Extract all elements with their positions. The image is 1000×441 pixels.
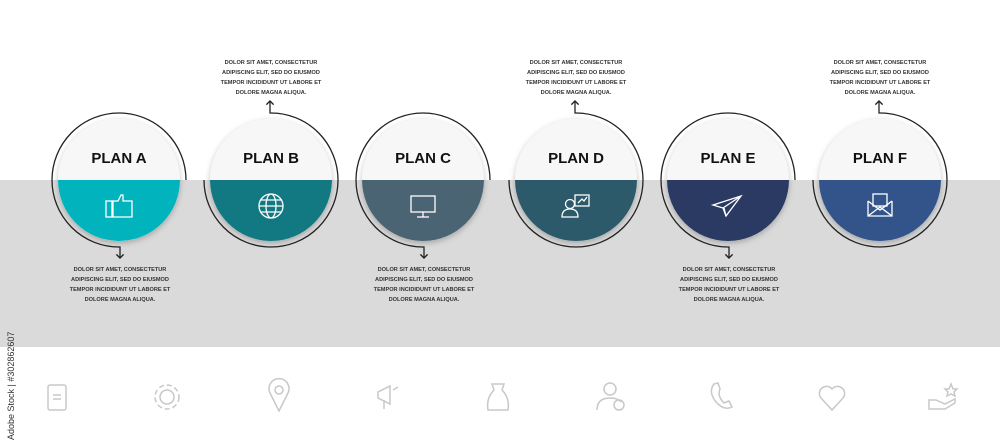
text E: DOLORE MAGNA ALIQUA. xyxy=(694,297,765,303)
icon: globe xyxy=(259,194,283,218)
text A: TEMPOR INCIDIDUNT UT LABORE ET xyxy=(70,287,171,293)
icon: gear xyxy=(155,385,179,409)
text F: ADIPISCING ELIT, SED DO EIUSMOD xyxy=(831,70,929,76)
icon: envelope xyxy=(868,194,892,216)
text B: DOLORE MAGNA ALIQUA. xyxy=(236,90,307,96)
plan B xyxy=(204,101,338,247)
plan B: PLAN B xyxy=(243,150,299,167)
text F: DOLORE MAGNA ALIQUA. xyxy=(845,90,916,96)
text F xyxy=(830,60,931,96)
text A xyxy=(70,267,171,303)
text D: DOLOR SIT AMET, CONSECTETUR xyxy=(530,60,622,66)
text B xyxy=(221,60,322,96)
text A: DOLOR SIT AMET, CONSECTETUR xyxy=(74,267,166,273)
icon: megaphone xyxy=(378,386,398,409)
text C: DOLORE MAGNA ALIQUA. xyxy=(389,297,460,303)
text E xyxy=(679,267,780,303)
plan A: PLAN A xyxy=(91,150,147,167)
icon: clipboard xyxy=(48,385,66,410)
plan E xyxy=(661,113,795,258)
icon: heart xyxy=(819,386,845,410)
icon: bag xyxy=(488,384,508,410)
text A: DOLORE MAGNA ALIQUA. xyxy=(85,297,156,303)
text C: TEMPOR INCIDIDUNT UT LABORE ET xyxy=(374,287,475,293)
plan A xyxy=(52,113,186,258)
text F: TEMPOR INCIDIDUNT UT LABORE ET xyxy=(830,80,931,86)
text A: ADIPISCING ELIT, SED DO EIUSMOD xyxy=(71,277,169,283)
plan F: PLAN F xyxy=(853,150,907,167)
text E: TEMPOR INCIDIDUNT UT LABORE ET xyxy=(679,287,780,293)
text F: DOLOR SIT AMET, CONSECTETUR xyxy=(834,60,926,66)
icon: paper plane xyxy=(713,196,741,216)
gray band xyxy=(0,180,1000,347)
text B: TEMPOR INCIDIDUNT UT LABORE ET xyxy=(221,80,322,86)
text D: ADIPISCING ELIT, SED DO EIUSMOD xyxy=(527,70,625,76)
plan C: PLAN C xyxy=(395,150,451,167)
bottom icon row xyxy=(48,379,957,411)
text B: DOLOR SIT AMET, CONSECTETUR xyxy=(225,60,317,66)
text E: DOLOR SIT AMET, CONSECTETUR xyxy=(683,267,775,273)
side watermark text: Adobe Stock | #302862607 xyxy=(6,332,16,440)
text E: ADIPISCING ELIT, SED DO EIUSMOD xyxy=(680,277,778,283)
icon: phone xyxy=(711,383,732,408)
text C: DOLOR SIT AMET, CONSECTETUR xyxy=(378,267,470,273)
text C xyxy=(374,267,475,303)
text C: ADIPISCING ELIT, SED DO EIUSMOD xyxy=(375,277,473,283)
text B: ADIPISCING ELIT, SED DO EIUSMOD xyxy=(222,70,320,76)
plan C xyxy=(356,113,490,258)
plan D xyxy=(509,101,643,247)
plan F xyxy=(813,101,947,247)
icon: user check xyxy=(597,383,624,410)
icon: hand star xyxy=(929,384,957,409)
icon: monitor xyxy=(411,196,435,217)
text D: TEMPOR INCIDIDUNT UT LABORE ET xyxy=(526,80,627,86)
text D: DOLORE MAGNA ALIQUA. xyxy=(541,90,612,96)
icon: presenter xyxy=(562,195,589,217)
icon: pin xyxy=(269,379,289,411)
plan E: PLAN E xyxy=(700,150,756,167)
icon: thumbs up xyxy=(106,195,132,217)
text D xyxy=(526,60,627,96)
plan D: PLAN D xyxy=(548,150,604,167)
